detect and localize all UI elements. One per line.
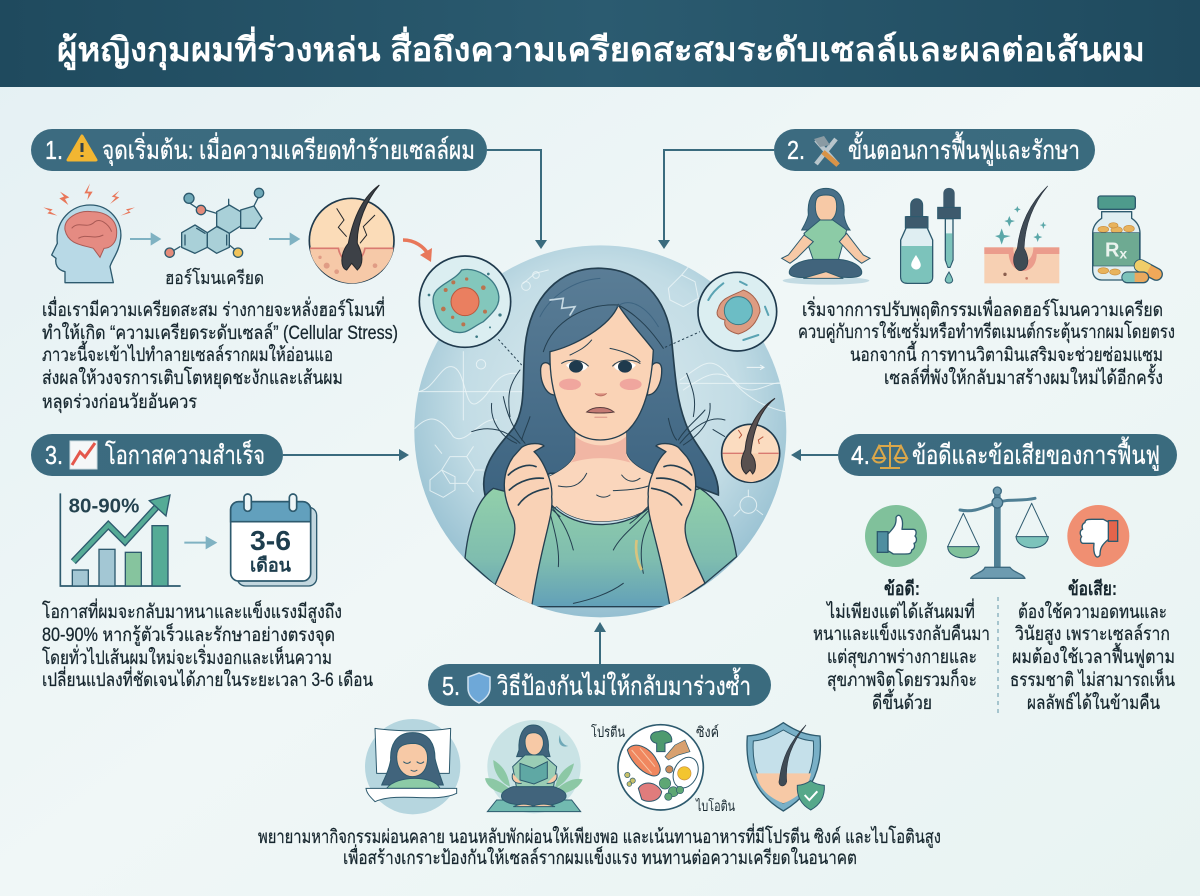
central illustration: woman holding fallen hair (414, 245, 786, 617)
arrow (130, 236, 153, 242)
body text 5: เพื่อสร้างเกราะป้องกันให้เซลล์รากผมแข็งแรง ทนทานต่อความเครียดในอนาคต (343, 844, 857, 869)
food labels (591, 723, 735, 815)
heading pill 5: 5. (442, 671, 460, 701)
pros column (813, 578, 990, 714)
section 1 (31, 129, 487, 414)
body text 1: เมื่อเรามีความเครียดสะสม ร่างกายจะหลั่งฮอร์โมนที่ (42, 296, 385, 321)
heading pill 2: 2. (787, 135, 805, 165)
calendar: เดือน (250, 554, 291, 575)
pros column: ข้อดี: (884, 578, 920, 600)
hands (495, 444, 552, 607)
cons column (1010, 578, 1175, 714)
body text 5: พยายามหากิจกรรมผ่อนคลาย นอนหลับพักผ่อนให้เพียงพอ และเน้นทานอาหารที่มีโปรตีน ซิงค์ และไบโอตินสูง (258, 823, 941, 848)
icons: brain, stress hormone, damaged follicle (43, 183, 394, 283)
icon: thumbs down (1067, 505, 1129, 567)
heading pill 4 (838, 434, 1177, 476)
pros column: สุขภาพจิตโดยรวมก็จะ (827, 667, 977, 692)
icon: shield with follicle (747, 723, 824, 811)
inset: healthy cell (419, 256, 511, 347)
icon: follicle with stressed hair (309, 185, 394, 283)
heading pill 3: 3. (45, 440, 63, 470)
icon: prescription bottle and capsules: R (1105, 240, 1119, 262)
prevention icons (365, 719, 824, 814)
body text 1: ส่งผลให้วงจรการเติบโตหยุดชะงักและเส้นผม (42, 366, 343, 390)
pros column: ไม่เพียงแต่ได้เส้นผมที่ (825, 598, 975, 623)
body text 3: เปลี่ยนแปลงที่ชัดเจนได้ภายในระยะเวลา 3-6 เดือน (42, 666, 373, 691)
body text 3: โดยทั่วไปเส้นผมใหม่จะเริ่มงอกและเห็นความ (42, 644, 332, 669)
heading pill 1 (31, 129, 487, 171)
heading pill 5 (428, 664, 771, 706)
icon: stressed head (43, 183, 135, 283)
body text 1: หลุดร่วงก่อนวัยอันควร (42, 392, 197, 414)
cons column: ข้อเสีย: (1068, 578, 1117, 600)
growth chart (60, 493, 181, 586)
icon: food plate (618, 725, 703, 810)
food labels: ไบโอติน (695, 797, 735, 815)
neck and chest (549, 432, 697, 522)
icon: meditating woman (782, 188, 870, 285)
cons column: ผมต้องใช้เวลาฟื้นฟูตาม (1012, 643, 1175, 668)
body text 3 (42, 598, 373, 691)
calendar (231, 494, 317, 586)
section 5 (258, 664, 941, 869)
cons column: ต้องใช้ความอดทนและ (1018, 601, 1167, 623)
heading pill 2: ขั้นตอนการฟื้นฟูและรักษา (848, 131, 1080, 166)
section 2 (774, 129, 1175, 389)
pros column: แต่สุขภาพร่างกายและ (827, 647, 977, 669)
hair back (484, 268, 718, 495)
face (541, 305, 662, 440)
dotted leaders (498, 332, 700, 365)
icon: prescription bottle and capsules (1093, 196, 1164, 283)
heading pill 5: วิธีป้องกันไม่ให้กลับมาร่วงซ้ำ (497, 667, 751, 701)
body text 2 (798, 296, 1175, 389)
icon: prescription bottle and capsules: x (1119, 246, 1127, 262)
section 4 (813, 434, 1177, 714)
title: ผู้หญิงกุมผมที่ร่วงหล่น สื่อถึงความเครียดสะสมระดับเซลล์และผลต่อเส้นผม (57, 26, 1145, 71)
divider (997, 597, 999, 713)
body text 1: ภาวะนี้จะเข้าไปทำลายเซลล์รากผมให้อ่อนแอ (42, 341, 333, 366)
icon: balance scale (948, 487, 1048, 578)
icon: hormone molecule (165, 188, 264, 257)
cons column: วินัยสูง เพราะเซลล์ราก (1015, 623, 1170, 645)
body text 3: โอกาสที่ผมจะกลับมาหนาและแข็งแรงมีสูงถึง (42, 598, 342, 623)
heading pill 2 (774, 129, 1095, 171)
body text 1 (42, 296, 398, 414)
growth chart: 80-90% (69, 495, 140, 517)
icon: sleeping woman (365, 719, 460, 814)
icon: serum bottle and dropper (901, 188, 960, 283)
body text 5 (258, 823, 941, 869)
inset: damaged cell (698, 272, 777, 351)
arrow (184, 540, 208, 546)
hair front highlights (540, 278, 663, 352)
heading pill 4: 4. (851, 440, 870, 470)
icon: reading woman (485, 720, 583, 813)
pros column: ดีขึ้นด้วย (872, 689, 932, 714)
heading pill 3 (31, 434, 283, 476)
icon: thumbs up (865, 505, 927, 567)
heading pill 3: โอกาสความสำเร็จ (105, 439, 265, 470)
label: stress hormone: ฮอร์โมนเครียด (165, 267, 264, 288)
inset: follicle (722, 398, 780, 482)
food labels: ซิงค์ (696, 724, 719, 741)
shirt (465, 488, 737, 607)
pros column: หนาและแข็งแรงกลับคืนมา (813, 621, 990, 645)
food labels: โปรตีน (591, 723, 625, 741)
chart and calendar (60, 493, 317, 586)
cons column: ผลลัพธ์ได้ในข้ามคืน (1027, 692, 1160, 714)
connector arrows (283, 150, 838, 664)
body text 1: ทำให้เกิด “ความเครียดระดับเซลล์” (Cellular Stress) (42, 322, 398, 344)
treatment icons (782, 186, 1164, 285)
title banner (0, 0, 1200, 87)
body text 3: 80-90% หากรู้ตัวเร็วและรักษาอย่างตรงจุด (42, 622, 335, 647)
icon: healthy follicle (984, 186, 1059, 283)
calendar: 3-6 (250, 525, 291, 556)
heading pill 1: จุดเริ่มต้น: เมื่อความเครียดทำร้ายเซลล์ผม (102, 132, 475, 166)
stress waves and molecules background (415, 265, 785, 516)
section 3 (31, 434, 373, 691)
curved arrow to cell (403, 240, 428, 254)
heading pill 1: 1. (45, 135, 63, 165)
loose hair strands (472, 370, 725, 573)
icons: thumbs and scales (865, 487, 1129, 578)
arrow (269, 236, 292, 242)
